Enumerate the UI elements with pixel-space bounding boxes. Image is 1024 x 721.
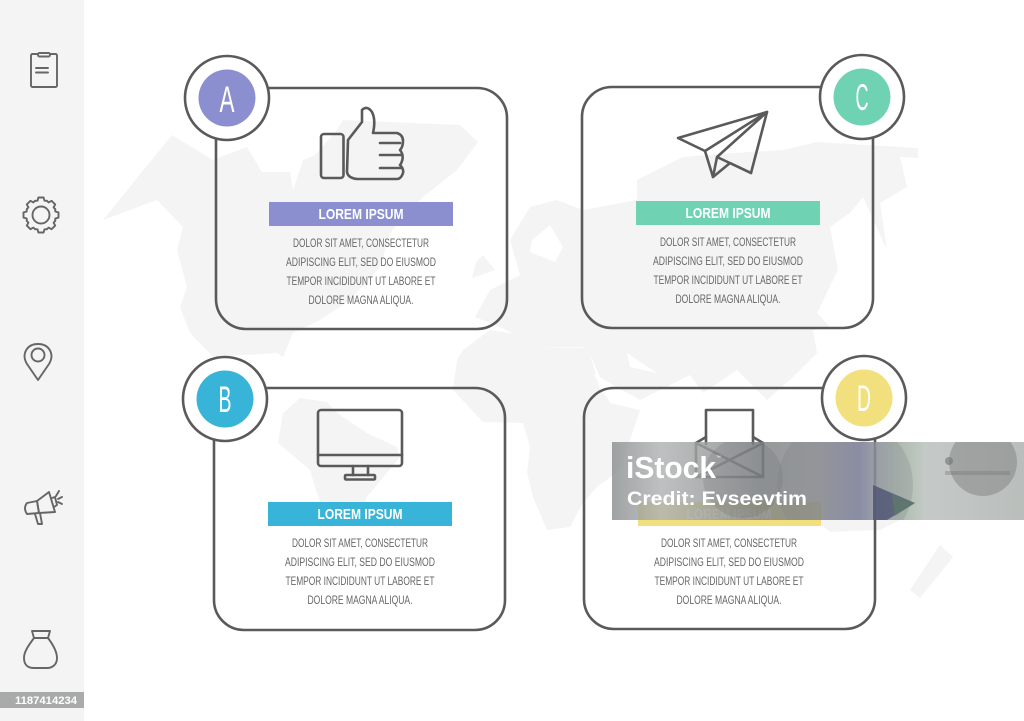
badge B: B <box>218 379 232 420</box>
image id strip: 1187414234 <box>15 695 78 707</box>
body text B: DOLOR SIT AMET, CONSECTETUR <box>292 536 428 550</box>
body text A <box>286 236 436 307</box>
body text B <box>285 536 435 607</box>
heading bar B: LOREM IPSUM <box>318 506 402 523</box>
body text A: TEMPOR INCIDIDUNT UT LABORE ET <box>286 274 436 288</box>
body text B: TEMPOR INCIDIDUNT UT LABORE ET <box>286 574 435 588</box>
world map background <box>103 120 953 598</box>
body text A: DOLOR SIT AMET, CONSECTETUR <box>293 236 429 250</box>
badge A <box>185 56 269 140</box>
panel: A <box>185 56 507 329</box>
body text B: DOLORE MAGNA ALIQUA. <box>308 593 412 607</box>
body text C: TEMPOR INCIDIDUNT UT LABORE ET <box>654 273 803 287</box>
body text A: DOLORE MAGNA ALIQUA. <box>308 293 414 307</box>
stock watermark band <box>612 442 1024 520</box>
left sidebar <box>0 0 84 721</box>
icon: thumbs up <box>321 108 403 179</box>
icon: money bag <box>24 631 57 668</box>
body text C <box>653 235 803 306</box>
panel: D <box>584 356 906 629</box>
body text D: DOLOR SIT AMET, CONSECTETUR <box>661 536 797 550</box>
body text C: DOLORE MAGNA ALIQUA. <box>676 292 780 306</box>
badge D: D <box>857 378 871 419</box>
icon: megaphone <box>25 491 62 524</box>
heading bar D: LOREM IPSUM <box>686 506 772 523</box>
body text D: ADIPISCING ELIT, SED DO EIUSMOD <box>654 555 804 569</box>
body text C: DOLOR SIT AMET, CONSECTETUR <box>660 235 796 249</box>
heading bar A <box>269 202 453 226</box>
panel: C <box>582 55 904 328</box>
iStock wordmark: iStock <box>626 450 717 485</box>
panel: B <box>183 357 505 630</box>
heading bar C: LOREM IPSUM <box>686 205 770 222</box>
icon: envelope <box>696 410 763 477</box>
badge A: A <box>220 79 235 120</box>
body text D: DOLORE MAGNA ALIQUA. <box>676 593 782 607</box>
icon: paper plane <box>678 112 767 177</box>
body text A: ADIPISCING ELIT, SED DO EIUSMOD <box>286 255 436 269</box>
credit line: Credit: Evseevtim <box>627 489 807 510</box>
icon: location pin <box>25 344 51 380</box>
body text C: ADIPISCING ELIT, SED DO EIUSMOD <box>653 254 803 268</box>
icon: clipboard <box>31 53 57 87</box>
heading bar A: LOREM IPSUM <box>318 206 404 223</box>
badge C: C <box>856 77 868 118</box>
heading bar B <box>268 502 452 526</box>
icon: monitor <box>318 410 402 480</box>
badge C <box>820 55 904 139</box>
trademark mark: ™ <box>716 455 721 461</box>
body text D: TEMPOR INCIDIDUNT UT LABORE ET <box>654 574 804 588</box>
image id strip <box>0 692 84 708</box>
badge B <box>183 357 267 441</box>
heading bar D <box>638 502 821 526</box>
heading bar C <box>636 201 820 225</box>
body text B: ADIPISCING ELIT, SED DO EIUSMOD <box>285 555 435 569</box>
icon: gear <box>24 198 58 232</box>
badge D <box>822 356 906 440</box>
body text D <box>654 536 804 607</box>
